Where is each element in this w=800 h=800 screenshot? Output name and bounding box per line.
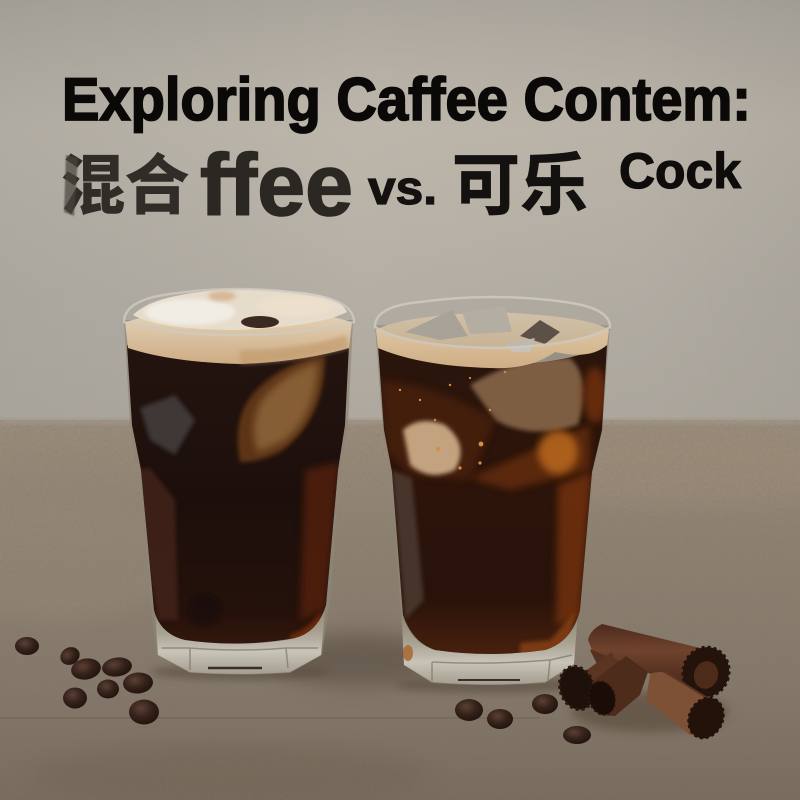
cola liquid — [370, 340, 615, 660]
glass body — [124, 320, 353, 674]
base pooled shadow — [458, 679, 520, 681]
stick: front right — [646, 672, 722, 737]
stick end: left hollow — [554, 662, 600, 714]
stick: back long — [588, 624, 708, 690]
stick: centre — [592, 656, 648, 716]
foam top — [133, 289, 347, 330]
heading word: cola in Chinese: 可乐 — [452, 148, 588, 224]
stick end: centre hollow — [585, 678, 619, 718]
stick end: front right — [682, 692, 730, 744]
heading word: Cock: Cock — [619, 143, 741, 199]
glass: right iced cola — [370, 297, 615, 685]
bean — [15, 637, 159, 724]
glass: left iced coffee — [120, 289, 360, 674]
coffee beans: right group — [455, 694, 591, 744]
stick: left slim — [584, 652, 618, 686]
heading line 1: Exploring Caffee Contem: — [62, 66, 751, 133]
glass base — [155, 600, 326, 674]
amber reflection — [403, 645, 413, 661]
title — [61, 66, 751, 234]
glass shadows — [150, 634, 585, 693]
background wall — [0, 0, 800, 425]
coffee beans: left group — [15, 637, 159, 724]
stick: rear small — [590, 640, 640, 670]
base pooled shadow — [208, 667, 262, 669]
foam layer — [125, 306, 352, 364]
glass body — [375, 325, 610, 685]
ice cubes — [405, 310, 468, 340]
foam ring — [376, 312, 609, 368]
heading word: vs.: vs. — [368, 161, 437, 214]
stick end: back long — [677, 642, 735, 702]
heading line 2: mixed characters: 混合 — [61, 149, 189, 222]
cinnamon sticks — [554, 624, 735, 744]
rim — [124, 289, 354, 335]
base facets — [432, 655, 572, 681]
coffee liquid — [127, 345, 349, 644]
smudge on first character — [64, 155, 78, 216]
rim — [375, 297, 610, 348]
table surface — [0, 419, 800, 800]
heading word: ffee: ffee — [200, 137, 353, 234]
ice top — [241, 316, 279, 328]
base facets — [162, 648, 318, 670]
glass base — [402, 610, 578, 684]
stick shadow — [572, 692, 728, 732]
bubbles — [399, 371, 506, 470]
